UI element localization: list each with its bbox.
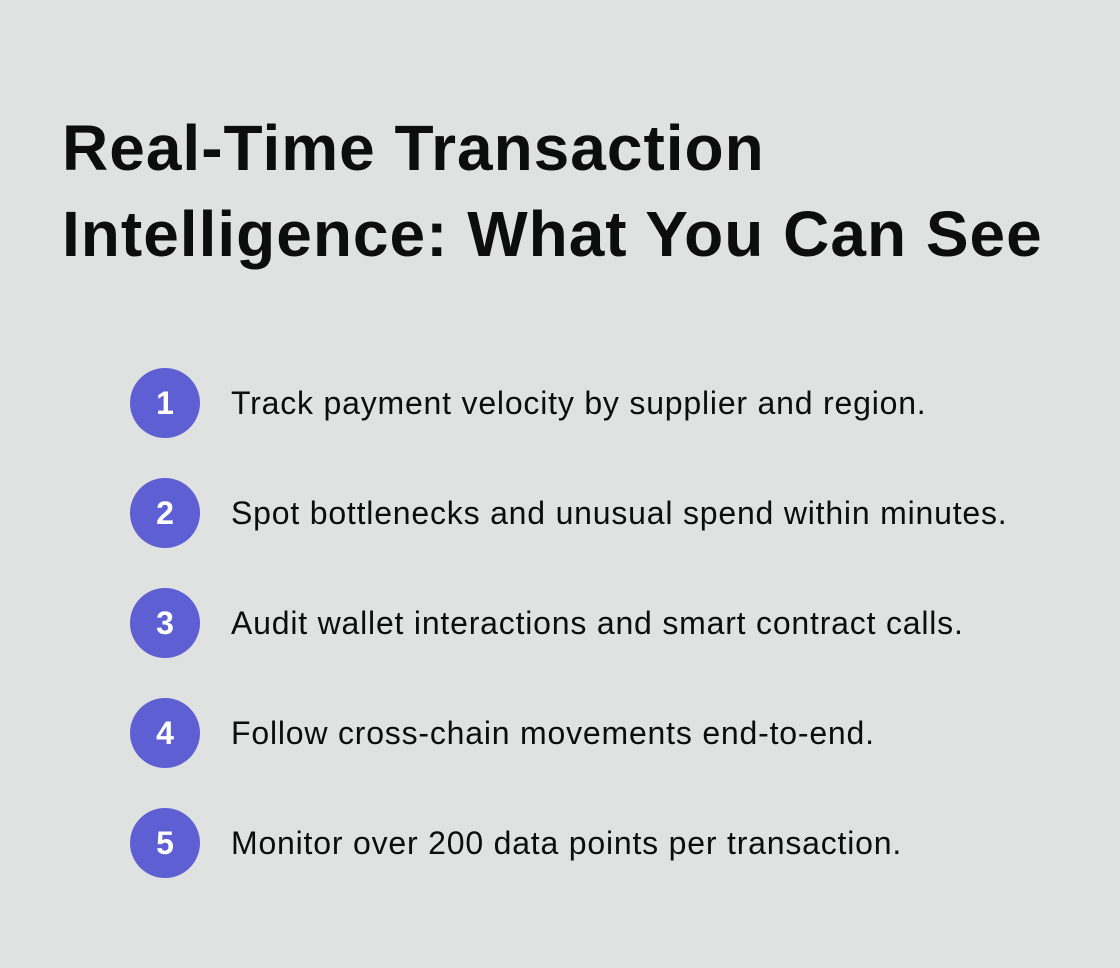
icon: number 2: 2	[156, 495, 174, 531]
icon: number 4: 4	[156, 715, 174, 751]
item 4	[130, 698, 875, 768]
icon: number 1: 1	[156, 385, 174, 421]
text 1: Track payment velocity by supplier and region.	[231, 385, 926, 421]
item 5	[130, 808, 902, 878]
icon: number 4	[130, 698, 200, 768]
title: Intelligence: What You Can See	[62, 198, 1043, 270]
icon: number 3: 3	[156, 605, 174, 641]
icon: number 1	[130, 368, 200, 438]
item 2	[130, 478, 1007, 548]
item 3	[130, 588, 964, 658]
icon: number 5	[130, 808, 200, 878]
text 4: Follow cross-chain movements end-to-end.	[231, 715, 875, 751]
icon: number 2	[130, 478, 200, 548]
icon: number 3	[130, 588, 200, 658]
text 3: Audit wallet interactions and smart contract calls.	[231, 605, 964, 641]
text 2: Spot bottlenecks and unusual spend within minutes.	[231, 495, 1007, 531]
text 5: Monitor over 200 data points per transaction.	[231, 825, 902, 861]
title	[62, 112, 1043, 270]
title: Real-Time Transaction	[62, 112, 765, 184]
icon: number 5: 5	[156, 825, 174, 861]
item 1	[130, 368, 926, 438]
